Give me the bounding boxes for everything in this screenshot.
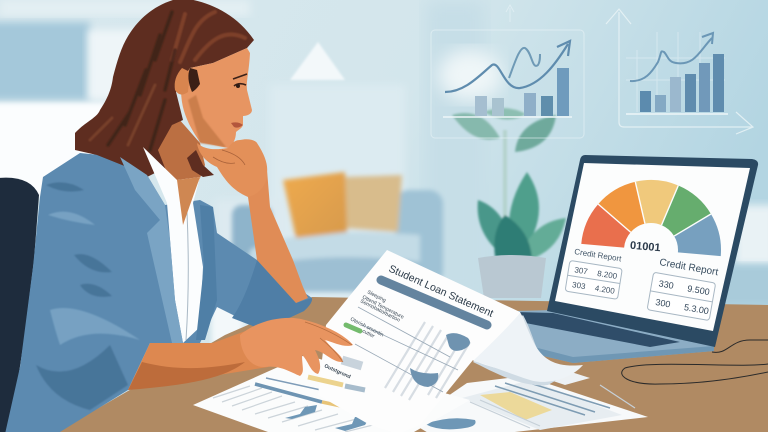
ear [175, 68, 190, 95]
hand on paper [240, 318, 353, 376]
gauge value: 01001 [629, 240, 661, 254]
plant pot [478, 255, 546, 298]
credit report table: left: 4.200 [594, 284, 616, 296]
hand at chin [197, 139, 267, 197]
credit report table: right: 9.500 [687, 283, 710, 297]
sleeve cuff: raised arm [232, 260, 312, 330]
neck [150, 118, 205, 200]
lower arm [128, 323, 280, 390]
statement detail lines [323, 289, 405, 380]
blazer folds [36, 182, 128, 410]
green status pill [346, 325, 360, 331]
blue badge: bottom [410, 368, 438, 387]
student loan statement [308, 250, 583, 432]
lips [231, 122, 243, 128]
face shading [188, 95, 226, 147]
credit report table: right: Credit Report [658, 257, 719, 278]
white blouse [143, 147, 203, 343]
open neck [177, 177, 200, 225]
finger lines [305, 322, 352, 362]
face [181, 48, 252, 148]
statement detail lines: Sennobatiorbartion [359, 298, 401, 324]
paper: lower left financial sheet [193, 355, 470, 432]
credit report table: left: 303 [571, 280, 587, 291]
laptop [515, 155, 758, 363]
right lapel [196, 205, 217, 340]
floor lamp [290, 42, 345, 80]
blouse placket [186, 212, 188, 340]
statement detail lines: Oterish orsentin [349, 316, 385, 338]
left lapel [120, 157, 183, 343]
screen bezel [547, 155, 758, 347]
chair [0, 178, 39, 432]
statement header bar [381, 280, 487, 325]
hair shading [90, 12, 245, 150]
credit score gauge [581, 174, 727, 256]
credit report table: right: 5.3.00 [683, 302, 710, 316]
highlight rows [308, 377, 343, 385]
statement title: Student Loan Statement [387, 263, 495, 320]
curled page shadow [473, 315, 583, 385]
hair tuft beside neck [187, 150, 214, 177]
statement page [318, 250, 540, 432]
charging cable [622, 340, 768, 384]
screen [555, 163, 750, 331]
statement detail lines: cutter [361, 328, 376, 340]
credit report table: right: 300 [655, 297, 671, 309]
blue badge: top [446, 333, 470, 351]
lower arm shadow [128, 362, 245, 390]
statement detail lines: Outstgrond [323, 363, 351, 380]
credit report table: left: Credit Report [574, 247, 623, 264]
raised forearm [247, 170, 308, 303]
keyboard [515, 312, 680, 347]
table stripes [385, 322, 470, 400]
credit report table: left: 307 [574, 265, 589, 276]
eye and brow [233, 74, 247, 86]
floating chart panel: left [431, 5, 584, 138]
statement detail lines: Ottentl Temperature [361, 294, 405, 321]
blazer body [5, 153, 312, 432]
blurred sofa with pillows [232, 172, 443, 292]
plant [452, 108, 566, 262]
woman [5, 0, 353, 432]
floating chart panel: right [606, 9, 753, 134]
credit report table: right [647, 256, 719, 321]
hair [75, 0, 254, 177]
laptop base [515, 310, 714, 363]
curl highlight [473, 313, 583, 382]
credit report table: left [565, 247, 624, 299]
credit report table: left: 8.200 [597, 269, 618, 281]
knuckle lines [213, 150, 245, 165]
statement detail lines: Sleeping [366, 289, 387, 304]
paper: lower right report [410, 362, 648, 432]
credit report table: right: 330 [658, 278, 674, 291]
desk [57, 297, 768, 432]
sideburn [188, 68, 200, 92]
blazer highlights [48, 212, 140, 345]
